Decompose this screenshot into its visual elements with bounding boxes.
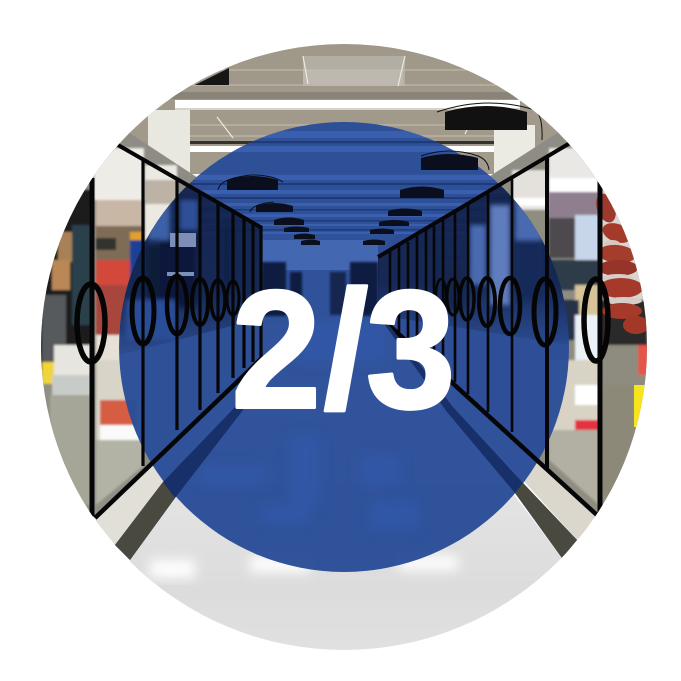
statistic: 2/3: 2/3 — [231, 255, 455, 443]
ceiling stripes — [150, 131, 538, 234]
ceiling — [51, 44, 637, 270]
soffit bands above freezers — [119, 132, 569, 184]
details inside blue circle — [120, 131, 580, 530]
photo: supermarket freezer aisle in a circle — [41, 44, 647, 650]
infographic: circular supermarket photo with statistic — [41, 44, 647, 650]
sausages in freezer display — [596, 194, 646, 334]
pillar: left — [148, 110, 190, 173]
left freezer doors photo — [41, 145, 186, 518]
hanging sign wires — [218, 103, 542, 212]
aisle end shelves — [262, 262, 378, 316]
floor light patches — [200, 322, 420, 530]
door handles — [77, 276, 608, 362]
pillar: right — [494, 125, 535, 174]
right freezer doors photo — [502, 144, 647, 514]
hanging signs — [227, 106, 527, 245]
right door interiors — [378, 186, 568, 344]
white base under left freezer — [95, 466, 164, 545]
white label on left door — [170, 233, 196, 247]
floor — [130, 494, 562, 650]
freezer kick plates — [115, 325, 577, 560]
black ceiling fixture top-left — [195, 68, 229, 85]
white base under right freezer — [524, 463, 596, 540]
freezer rails and door frames — [92, 143, 600, 518]
pale aisle end wall — [262, 240, 378, 270]
blue circle overlay — [119, 122, 569, 572]
left door interiors — [120, 186, 260, 354]
yellow price tag right — [634, 385, 646, 427]
far end of aisle — [262, 228, 378, 323]
